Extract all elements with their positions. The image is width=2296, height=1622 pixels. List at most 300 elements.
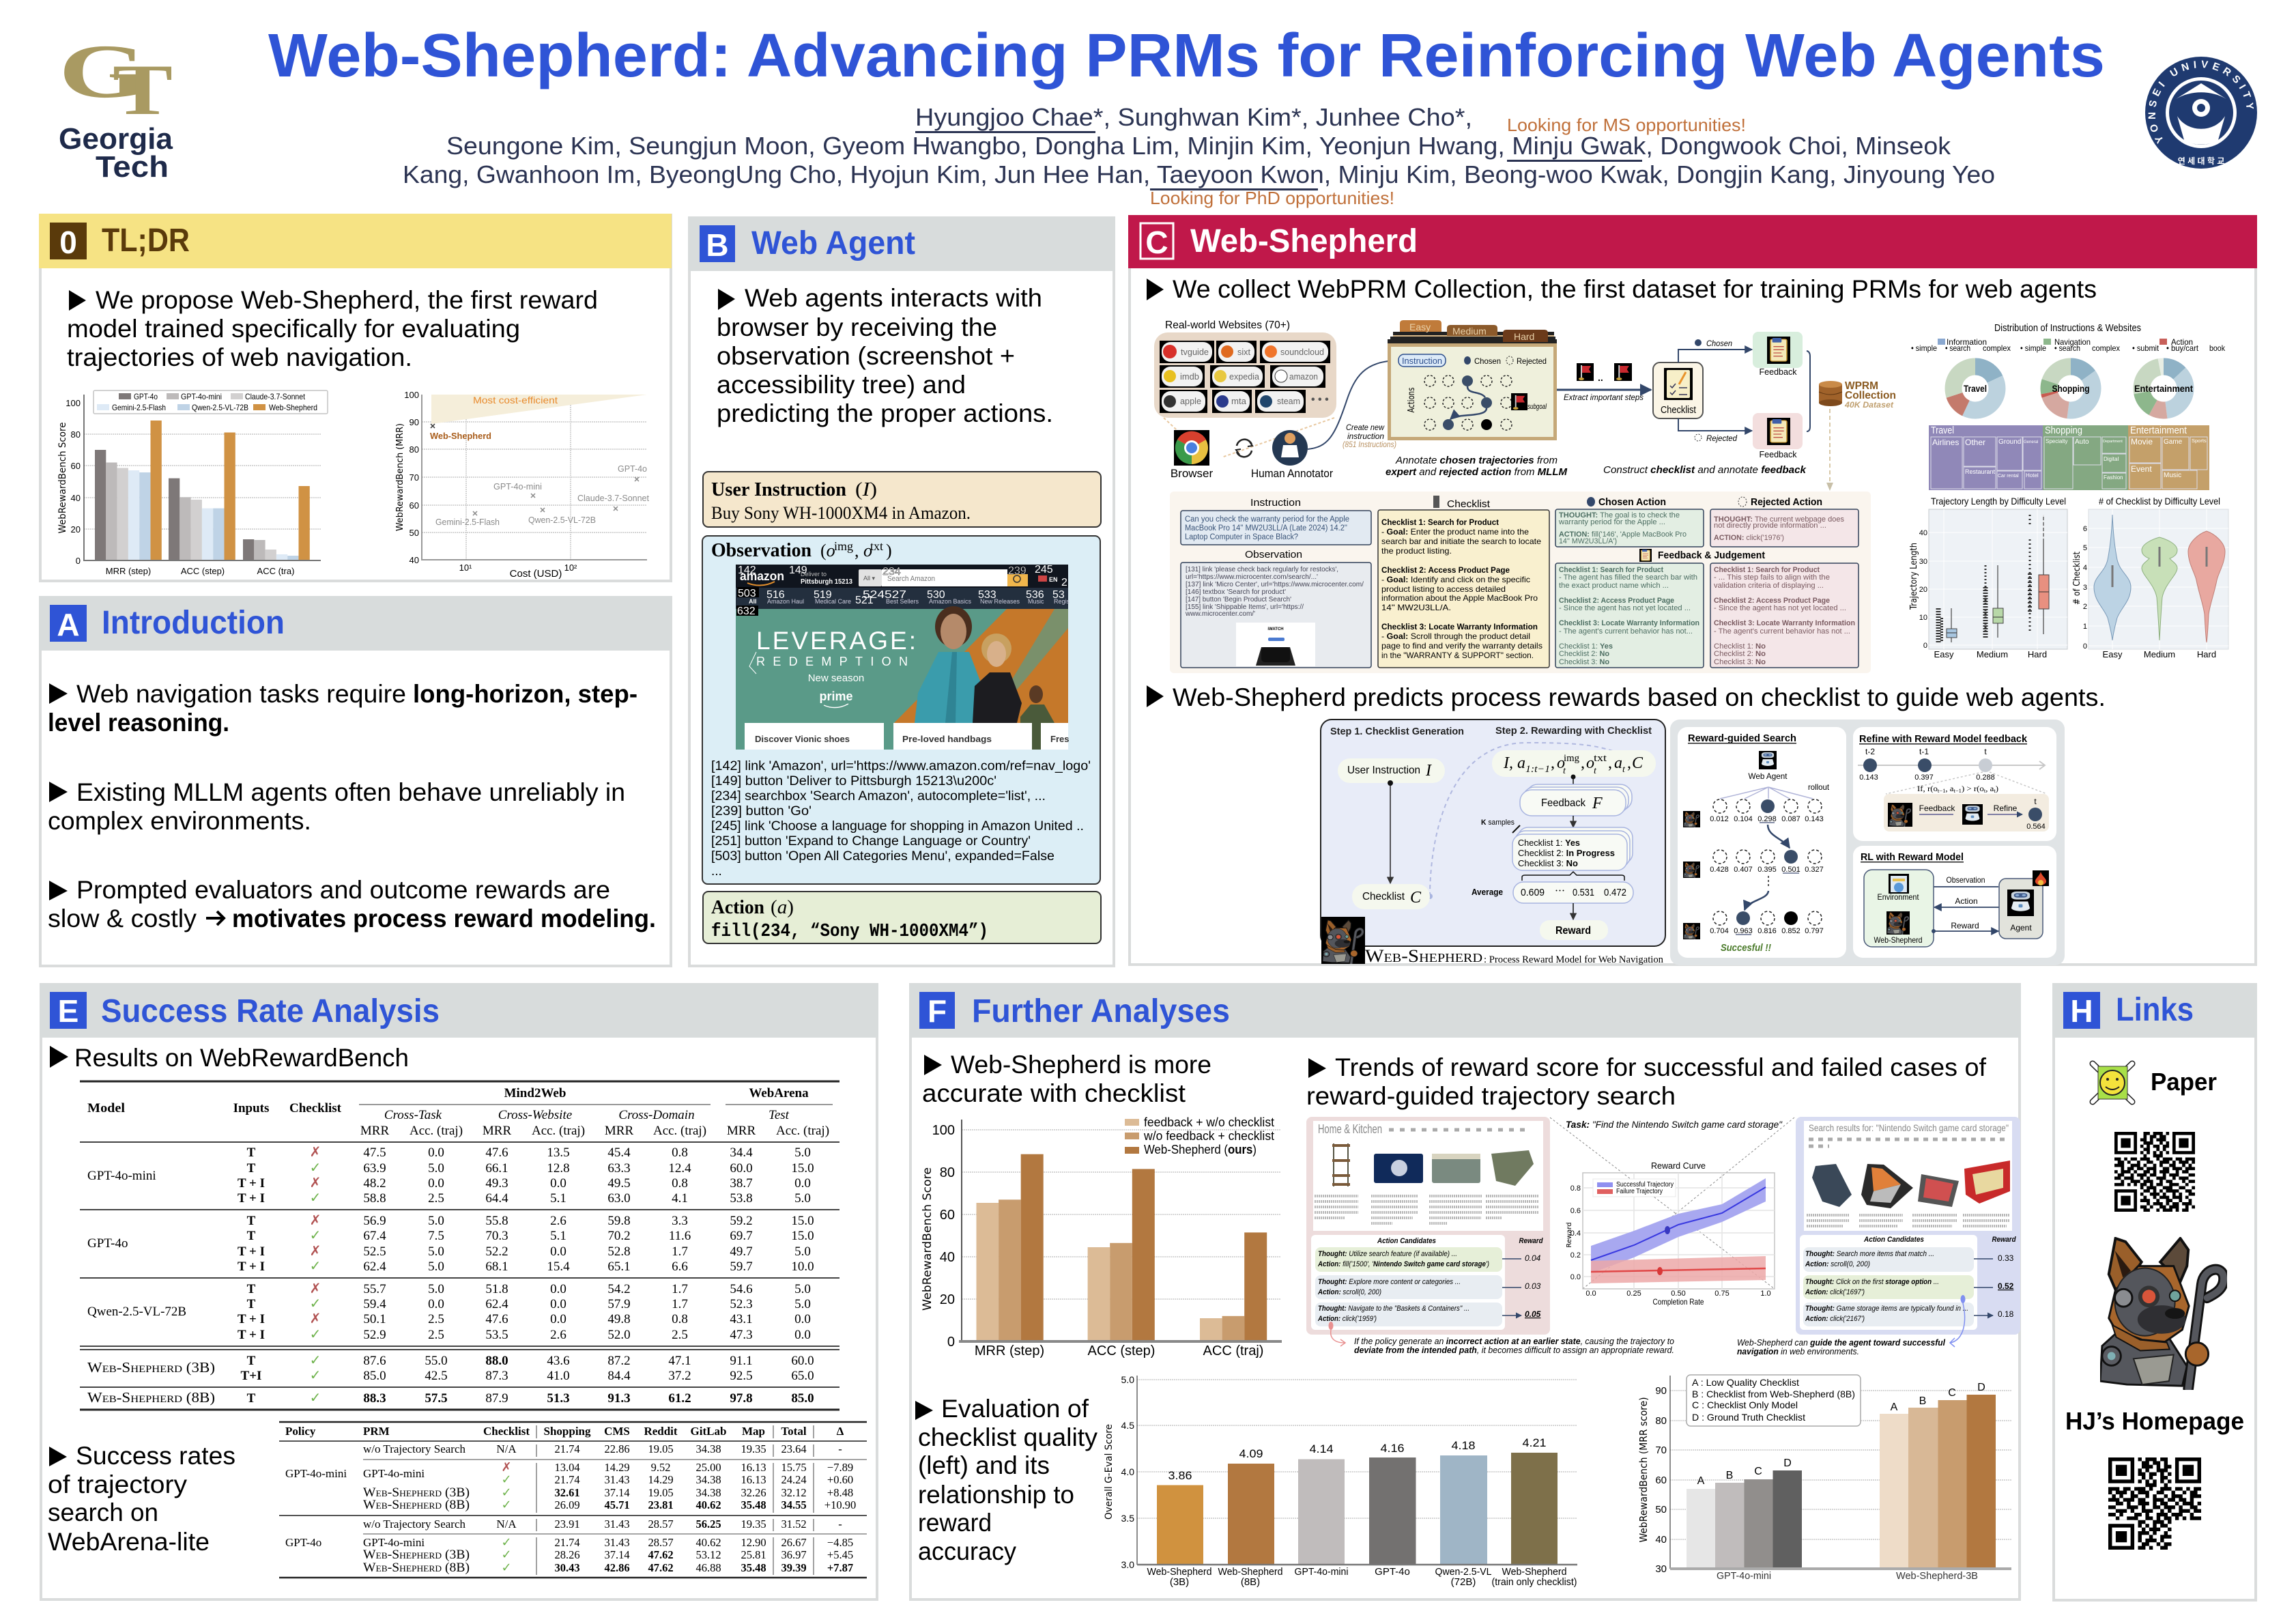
- card: refine with reward model feedback: t: [1994, 788, 1996, 794]
- table: WebRewardBench results: 50.1: [363, 1312, 386, 1326]
- table: trajectory search success rates: 22.86: [604, 1442, 630, 1455]
- card: reward-guided search: 0.395: [1757, 866, 1777, 874]
- table: WebRewardBench results: 0.8: [672, 1312, 688, 1326]
- reward curve chart: [1550, 1118, 1794, 1307]
- table: WebRewardBench results: 87.6: [363, 1354, 386, 1368]
- box: observation: ): [886, 541, 892, 560]
- feedback stack: Feedback: [1541, 797, 1586, 809]
- table: trajectory search success rates: 31.52: [781, 1518, 807, 1531]
- card: refine with reward model feedback: If, r(o: [1917, 784, 1936, 793]
- text: unreliable agents: complex environments.: [48, 807, 311, 835]
- text: slow and costly evaluators: slow & costly: [48, 905, 197, 933]
- note: successful case: [1737, 1337, 1945, 1356]
- checklist evaluation stack: Checklist 2: In Progress: [1518, 848, 1615, 858]
- authors: Kang, Gwanhoon Im, ByeongUng Cho, Hyojun Kim, Jun Hee Han, Taeyoon Kwon, Minju Kim, Beong-woo Kwak, Dongjin Kang, Jinyoung Yeo: [403, 160, 1995, 188]
- card: refine with reward model feedback: Refine with Reward Model feedback: [1859, 733, 2028, 745]
- table: WebRewardBench results: 59.8: [607, 1214, 631, 1228]
- table: WebRewardBench results: 57.5: [425, 1391, 448, 1406]
- text: web agent description: [717, 284, 1053, 427]
- bar chart: G-Eval score: (3B): [1170, 1576, 1189, 1588]
- box: user instruction: (I): [855, 479, 877, 500]
- table: WebRewardBench results: 15.0: [791, 1161, 814, 1176]
- table: WebRewardBench results: ✗: [310, 1244, 321, 1259]
- feedback cards: Feedback: [1760, 367, 1797, 377]
- card: refine with reward model feedback: t: [1984, 788, 1986, 794]
- box plot: trajectory length by difficulty: 10: [1919, 614, 1927, 622]
- text: checklist quality evaluation: checklist quality: [918, 1423, 1098, 1451]
- card: RL with reward model: Web-Shepherd: [1874, 935, 1922, 945]
- feedback and judgement boxes: Checklist 3: No: [1559, 658, 1609, 666]
- table: trajectory search success rates: 15.75: [781, 1461, 807, 1474]
- table: WebRewardBench results: Acc. (traj): [410, 1124, 463, 1138]
- donut: Entertainment: Entertainment: [2134, 383, 2193, 394]
- text: success rates: of trajectory: [48, 1470, 188, 1498]
- text: more accurate with checklist: accurate with checklist: [922, 1079, 1186, 1107]
- table: WebRewardBench results: ✗: [310, 1145, 321, 1160]
- reward curve chart: 0.0: [1585, 1290, 1596, 1298]
- authors: Seungone Kim, Seungjun Moon, Gyeom Hwangbo, Dongha Lim, Minjin Kim, Yeonjun Hwang, Minju Gwak, Dongwook Choi, Minseok: [446, 132, 1951, 160]
- screenshot: Amazon homepage: Amazon Basics: [929, 598, 972, 605]
- screenshot: Amazon homepage: 632: [737, 606, 756, 617]
- formula input node: t: [1563, 766, 1566, 776]
- table: trajectory search success rates: 23.81: [648, 1498, 674, 1511]
- bar chart: checklist quality vs reward accuracy: 80: [1655, 1415, 1667, 1427]
- card: refine with reward model feedback: t−1: [1938, 788, 1945, 794]
- screenshot: Amazon homepage: 519: [814, 589, 832, 601]
- table: WebRewardBench results: 12.8: [547, 1161, 570, 1176]
- card: refine with reward model feedback: 0.288: [1976, 773, 1995, 782]
- card: reward-guided search: 0.816: [1757, 927, 1777, 935]
- feedback and judgement boxes: Checklist 1: Yes: [1559, 642, 1613, 651]
- table: WebRewardBench results: 55.8: [485, 1214, 508, 1228]
- table: WebRewardBench results: ✓: [310, 1327, 321, 1342]
- table: WebRewardBench results: ✗: [310, 1281, 321, 1296]
- table: trajectory search success rates: 32.61: [554, 1486, 580, 1499]
- table: trajectory search success rates: 28.26: [554, 1548, 580, 1561]
- table: WebRewardBench results: 5.0: [428, 1282, 444, 1296]
- note: failed case: deviate from the intended path, it becomes difficult to assign an appropriate reward.: [1354, 1345, 1674, 1355]
- table: WebRewardBench results: 49.8: [607, 1312, 631, 1326]
- chosen action box: 14'' MW2U3LL/A'): [1559, 537, 1617, 545]
- text: long-horizon reasoning: [48, 680, 637, 737]
- donut: Travel: Travel: [1964, 383, 1987, 394]
- card: reward-guided search: 0.797: [1805, 927, 1824, 935]
- bar chart: G-Eval score: Overall G-Eval Score: [1104, 1424, 1115, 1520]
- logo: Yonsei University seal: YONSEI UNIVERSITY: [2149, 60, 2254, 144]
- table: trajectory search success rates: 34.55: [781, 1498, 807, 1511]
- text: slow and costly evaluators: [48, 876, 656, 933]
- chart: distribution of instructions and websites: Distribution of Instructions & Websites: [1994, 322, 2141, 334]
- bar chart: checklist quality vs reward accuracy: B: [1919, 1395, 1926, 1407]
- screenshot: Amazon homepage: amazon: [740, 569, 784, 583]
- table: WebRewardBench results: Web-Shepherd (8B): [87, 1389, 215, 1406]
- violin plot: checklists by difficulty: Hard: [2197, 649, 2216, 659]
- failed case panel: [1306, 1117, 1550, 1346]
- card: refine with reward model feedback: t−1: [1953, 788, 1962, 794]
- card: refine with reward model feedback: ): [1996, 784, 1998, 793]
- averaged score: 0.472: [1604, 887, 1626, 898]
- table: WebRewardBench results: 85.0: [791, 1391, 814, 1406]
- heading: Web-Shepherd: Web-Shepherd: [1190, 223, 1418, 259]
- violin plot: checklists by difficulty: # of Checklist by Difficulty Level: [2099, 496, 2220, 507]
- violin plot: checklists by difficulty: 1: [2083, 623, 2087, 631]
- scatter chart: reward score vs cost: 80: [410, 444, 419, 455]
- table: trajectory search success rates: +8.48: [827, 1486, 853, 1499]
- chart: distribution of instructions and websites: • simple: [1911, 343, 1937, 353]
- instruction box: MacBook Pro 14'' MW2U3LL/A (Late 2024) 14.2'': [1185, 524, 1347, 532]
- failed case panel: 0.03: [1525, 1281, 1541, 1291]
- screenshot: Amazon homepage: 516: [766, 589, 785, 601]
- table: trajectory search success rates: 13.04: [554, 1461, 580, 1474]
- table: WebRewardBench results: 6.6: [672, 1260, 688, 1274]
- table: WebRewardBench results: 1.7: [672, 1297, 688, 1311]
- screenshot: Amazon homepage: Fres: [1050, 734, 1069, 744]
- checklist box: - Goal: Identify and click on the specific: [1381, 575, 1530, 584]
- treemap: websites by category: Travel: [1931, 425, 1954, 436]
- bar chart: checklist quality vs reward accuracy: C: [1754, 1466, 1762, 1477]
- screenshot: Amazon homepage: 521: [855, 595, 874, 606]
- screenshot: Amazon homepage: REDEMPTION: [756, 655, 908, 668]
- table: WebRewardBench results: 85.0: [363, 1369, 386, 1383]
- text: accessibility tree: [142] link 'Amazon', url='https://www.amazon.com/ref=nav_logo': [711, 759, 1091, 773]
- checklist box: the product listing.: [1381, 546, 1452, 556]
- donut: Travel: [1953, 367, 1997, 410]
- table: WebRewardBench results: Cross-Task: [384, 1108, 442, 1122]
- extraction arrow and checklist: [1557, 339, 1752, 443]
- table: trajectory search success rates: +0.60: [827, 1473, 853, 1486]
- failed case panel: Thought: Explore more content or categories ...: [1318, 1278, 1461, 1286]
- extraction arrow and checklist: Extract important steps: [1564, 393, 1644, 402]
- bar chart: WebRewardBench score by model: 40: [71, 493, 81, 503]
- table: trajectory search success rates: 47.62: [648, 1561, 674, 1574]
- card: reward-guided search: 0.428: [1710, 866, 1729, 874]
- failed case panel: Thought: Navigate to the "Baskets & Containers" ...: [1318, 1305, 1469, 1313]
- screenshot: Amazon homepage: 2: [1061, 577, 1067, 588]
- table: WebRewardBench results: ✗: [310, 1311, 321, 1326]
- feedback and judgement boxes: - The agent has filled the search bar with: [1559, 573, 1697, 582]
- table: WebRewardBench results: T: [247, 1229, 256, 1243]
- table: WebRewardBench results: 59.7: [730, 1260, 753, 1274]
- screenshot: Amazon homepage: prime: [819, 689, 853, 703]
- violin plot: checklists by difficulty: 2: [2083, 603, 2087, 611]
- bar chart: checklist quality vs reward accuracy: B : Checklist from Web-Shepherd (8B): [1692, 1389, 1855, 1399]
- table: WebRewardBench results: 0.0: [550, 1312, 566, 1326]
- scatter chart: reward score vs cost: Qwen-2.5-VL-72B: [528, 515, 596, 525]
- table: WebRewardBench results: 87.3: [485, 1369, 508, 1383]
- label: homepage: HJ’s Homepage: [2065, 1407, 2244, 1435]
- treemap: websites by category: Specialty: [2046, 438, 2067, 444]
- table: trajectory search success rates: N/A: [496, 1442, 517, 1455]
- screenshot: Amazon homepage: Search Amazon: [887, 575, 935, 583]
- treemap: websites by category: Ground: [1998, 438, 2021, 446]
- table: WebRewardBench results: 2.5: [428, 1191, 444, 1206]
- heading: Introduction: Introduction: [102, 605, 285, 641]
- checklist box: Checklist 2: Access Product Page: [1381, 565, 1510, 575]
- feedback and judgement boxes: Checklist 3: Locate Warranty Information: [1559, 619, 1699, 627]
- table: WebRewardBench results: Inputs: [233, 1101, 269, 1115]
- successful case panel: Action: click('1697'): [1805, 1288, 1865, 1296]
- card: reward-guided search: 0.087: [1781, 815, 1800, 823]
- card: RL with reward model: Action: [1955, 896, 1978, 906]
- caption: annotate trajectories: [1386, 455, 1567, 478]
- rejected action box: [1710, 496, 1859, 547]
- table: WebRewardBench results: 60.0: [791, 1354, 814, 1368]
- checklist box: information about the Apple MacBook Pro: [1381, 593, 1538, 603]
- table: WebRewardBench results: WebArena: [749, 1086, 809, 1100]
- card: RL with reward model: [1853, 846, 2056, 958]
- box: action: (a): [771, 897, 794, 918]
- table: WebRewardBench results: 56.9: [363, 1214, 386, 1228]
- text: process rewards: Web-Shepherd predicts process rewards based on checklist to guide web agents.: [1173, 683, 2106, 711]
- screenshot: Amazon homepage: New Releases: [980, 598, 1020, 605]
- table: WebRewardBench results: 67.4: [363, 1229, 386, 1243]
- table: WebRewardBench results: 64.4: [485, 1191, 508, 1206]
- text: accessibility tree: [503] button 'Open All Categories Menu', expanded=False: [711, 849, 1054, 864]
- table: WebRewardBench results: Checklist: [289, 1101, 342, 1115]
- card: reward-guided search: 0.327: [1805, 866, 1824, 874]
- table: trajectory search success rates: +5.45: [827, 1548, 853, 1561]
- chart: distribution of instructions and websites: Navigation: [2054, 337, 2091, 347]
- table: trajectory search success rates: 25.81: [741, 1548, 766, 1561]
- box: observation: (o: [820, 541, 835, 560]
- table: trajectory search success rates: Reddit: [644, 1425, 678, 1438]
- table: WebRewardBench results: 7.5: [428, 1229, 444, 1243]
- chart: distribution of instructions and websites: • search: [1945, 343, 1970, 353]
- scatter chart: reward score vs cost: Web-Shepherd: [430, 431, 491, 441]
- box plot: trajectory length by difficulty: [1909, 496, 2067, 659]
- bar chart: checklist quality vs reward accuracy: WebRewardBench (MRR score): [1637, 1397, 1650, 1543]
- text: slow and costly evaluators: motivates process reward modeling.: [232, 905, 656, 933]
- screenshot: Amazon homepage: All ▾: [863, 575, 876, 582]
- table: trajectory search success rates: w/o Trajectory Search: [363, 1442, 465, 1455]
- box plot: trajectory length by difficulty: 40: [1919, 529, 1927, 537]
- screenshot: Amazon homepage: 524527: [863, 589, 906, 601]
- table: trajectory search success rates: w/o Trajectory Search: [363, 1518, 465, 1531]
- reward curve chart: 0.4: [1570, 1229, 1581, 1238]
- websites group: steam: [1277, 396, 1300, 406]
- table: WebRewardBench results: 47.6: [485, 1146, 508, 1160]
- formula input node: 1:t−1: [1525, 764, 1550, 775]
- successful case panel: Thought: Search more items that match ...: [1805, 1250, 1934, 1258]
- table: WebRewardBench results: 2.5: [428, 1328, 444, 1342]
- treemap: websites by category: Digital: [2104, 456, 2119, 462]
- browser and annotator: instruction: [1347, 431, 1384, 441]
- table: WebRewardBench results: ✓: [310, 1368, 321, 1383]
- panel: Success Rate Analysis: [40, 983, 878, 1599]
- table: WebRewardBench results: 59.4: [363, 1297, 386, 1311]
- table: WebRewardBench results: 47.3: [730, 1328, 753, 1342]
- table: WebRewardBench results: T + I: [238, 1328, 265, 1342]
- user instruction node: [1338, 758, 1445, 783]
- screenshot: Amazon homepage: Music: [1028, 598, 1044, 605]
- treemap: websites by category: Game: [2164, 438, 2183, 446]
- bar chart: G-Eval score: Qwen-2.5-VL: [1435, 1566, 1492, 1578]
- screenshot: Amazon homepage: Medical Care: [815, 598, 851, 605]
- table: WebRewardBench results: Cross-Domain: [618, 1108, 695, 1122]
- observation box: url='https://www.microcenter.com/search/...': [1186, 573, 1318, 581]
- scatter chart: reward score vs cost: 50: [410, 528, 419, 538]
- table: WebRewardBench results: 0.0: [428, 1297, 444, 1311]
- table: WebRewardBench results: 52.3: [730, 1297, 753, 1311]
- averaged score: 0.531: [1573, 887, 1594, 898]
- bar chart: WebRewardBench score by model: 20: [71, 524, 81, 535]
- heading: Further Analyses: F: [928, 993, 947, 1029]
- reward curve chart: 0.0: [1570, 1273, 1581, 1281]
- bar chart: accuracy with checklist: 80: [940, 1165, 955, 1180]
- feedback and judgement boxes: Checklist 1: Search for Product: [1714, 566, 1820, 574]
- table: WebRewardBench results: 52.5: [363, 1244, 386, 1259]
- treemap: websites by category: Car rental: [1998, 474, 2019, 479]
- successful case panel: [1796, 1117, 2020, 1347]
- screenshot: Amazon homepage: Deliver to: [801, 571, 827, 578]
- failed case panel: Thought: Utilize search feature (if available) ...: [1318, 1250, 1457, 1258]
- text: more accurate with checklist: [922, 1051, 1211, 1107]
- table: WebRewardBench results: 57.9: [607, 1297, 631, 1311]
- text: WebPRM Collection: We collect WebPRM Collection, the first dataset for training PRMs for web agents: [1173, 275, 2097, 303]
- card: refine with reward model feedback: t: [2034, 797, 2037, 806]
- table: trajectory search success rates: Map: [742, 1425, 765, 1438]
- extraction arrow and checklist: Checklist: [1661, 404, 1697, 416]
- scatter chart: reward score vs cost: [395, 390, 649, 580]
- table: WebRewardBench results: 60.0: [730, 1161, 753, 1176]
- table: WebRewardBench results: 52.8: [607, 1244, 631, 1259]
- bar chart: accuracy with checklist: ACC (step): [1088, 1343, 1155, 1358]
- table: WebRewardBench results: 49.5: [607, 1176, 631, 1191]
- table: WebRewardBench results: GPT-4o-mini: [87, 1169, 156, 1183]
- table: WebRewardBench results: 84.4: [607, 1369, 631, 1383]
- panel: Links: [2052, 983, 2257, 1600]
- scatter chart: reward score vs cost: 90: [410, 417, 419, 427]
- failed case panel: 0.05: [1525, 1309, 1541, 1319]
- folder of trajectories: Easy: [1409, 322, 1431, 332]
- box: observation: txt: [870, 539, 883, 553]
- card: refine with reward model feedback: , a: [1945, 784, 1954, 793]
- bar chart: accuracy with checklist: [921, 1115, 1282, 1358]
- folder of trajectories: Medium: [1452, 326, 1487, 337]
- formula input node: C: [1632, 754, 1644, 772]
- successful case panel: Thought: Game storage items are typically found in ...: [1805, 1305, 1968, 1313]
- successful case panel: Thought: Click on the first storage option ...: [1805, 1278, 1939, 1286]
- bar chart: G-Eval score: 4.16: [1380, 1442, 1405, 1455]
- checklist box: 14'' MW2U3LL/A.: [1381, 603, 1451, 612]
- table: trajectory search success rates: ✓: [501, 1485, 512, 1500]
- table: WebRewardBench results: MRR: [483, 1124, 511, 1138]
- table: WebRewardBench results: 5.0: [794, 1297, 811, 1311]
- violin plot: checklists by difficulty: 6: [2083, 525, 2087, 533]
- card: refine with reward model feedback: t: [1984, 747, 1987, 756]
- card: reward-guided search: 0.501: [1781, 866, 1800, 874]
- WPRM Collection database: 40K Dataset: [1844, 400, 1894, 410]
- table: WebRewardBench results: 0.0: [794, 1312, 811, 1326]
- scatter chart: reward score vs cost: 100: [404, 390, 419, 400]
- note: PhD opportunities: Looking for PhD opportunities!: [1150, 188, 1394, 208]
- table: trajectory search success rates: CMS: [604, 1425, 630, 1438]
- websites group: [1154, 319, 1336, 457]
- box plot: trajectory length by difficulty: Trajectory Length: [1909, 543, 1919, 610]
- bar chart: checklist quality vs reward accuracy: 30: [1655, 1563, 1667, 1575]
- folder of trajectories: [1388, 320, 1557, 440]
- feedback and judgement boxes: Checklist 3: Locate Warranty Information: [1714, 619, 1855, 627]
- treemap: websites by category: Music: [2164, 472, 2181, 479]
- table: trajectory search success rates: 35.48: [741, 1498, 766, 1511]
- table: WebRewardBench results: T + I: [238, 1176, 265, 1191]
- feedback and judgement boxes: Checklist 2: Access Product Page: [1559, 597, 1674, 605]
- table: trajectory search success rates: 14.29: [648, 1473, 674, 1486]
- observation box: iWATCH: [1267, 627, 1284, 631]
- panel: Web Agent: [688, 216, 1115, 966]
- table: WebRewardBench results: 88.0: [485, 1354, 508, 1368]
- checklist node: C: [1410, 889, 1422, 907]
- table: WebRewardBench results: 54.6: [730, 1282, 753, 1296]
- table: WebRewardBench results: 48.2: [363, 1176, 386, 1191]
- formula input node: a: [1517, 754, 1525, 772]
- table: WebRewardBench results: 5.0: [428, 1161, 444, 1176]
- bar chart: checklist quality vs reward accuracy: C: [1948, 1387, 1956, 1399]
- chart: distribution of instructions and websites: Information: [1947, 337, 1987, 347]
- table: trajectory search success rates: +10.90: [824, 1498, 856, 1511]
- text: slow and costly evaluators: Prompted evaluators and outcome rewards are: [76, 876, 610, 904]
- treemap: websites by category: Airlines: [1932, 438, 1959, 447]
- extraction arrow and checklist: ..: [1598, 372, 1603, 383]
- text: reward score trends: [1306, 1053, 1987, 1110]
- card: reward-guided search: 0.852: [1781, 927, 1800, 935]
- table: trajectory search success rates: 26.09: [554, 1498, 580, 1511]
- card: refine with reward model feedback: Refine: [1994, 803, 2018, 813]
- diagram: applications of reward model: [1670, 720, 2065, 965]
- treemap: websites by category: General: [2024, 440, 2038, 444]
- table: WebRewardBench results: ✓: [310, 1296, 321, 1311]
- table: WebRewardBench results: 65.0: [791, 1369, 814, 1383]
- table: WebRewardBench results: 43.6: [547, 1354, 570, 1368]
- bar chart: G-Eval score: (train only checklist): [1492, 1576, 1577, 1588]
- table: WebRewardBench results: 58.8: [363, 1191, 386, 1206]
- bar chart: checklist quality vs reward accuracy: A: [1891, 1402, 1898, 1413]
- table: WebRewardBench results: 66.1: [485, 1161, 508, 1176]
- checklist box: Checklist 3: Locate Warranty Information: [1381, 622, 1538, 631]
- table: WebRewardBench results: T + I: [238, 1191, 265, 1206]
- reward curve chart: Successful Trajectory: [1616, 1181, 1674, 1189]
- bar chart: G-Eval score: Web-Shepherd: [1502, 1566, 1567, 1578]
- card: refine with reward model feedback: t-2: [1865, 747, 1875, 756]
- table: WebRewardBench results: ✓: [310, 1191, 321, 1206]
- table: WebRewardBench results: 63.9: [363, 1161, 386, 1176]
- table: WebRewardBench results: T + I: [238, 1244, 265, 1259]
- box plot: trajectory length by difficulty: Trajectory Length by Difficulty Level: [1931, 496, 2066, 507]
- donut: Shopping: [2049, 367, 2093, 410]
- bar chart: WebRewardBench score by model: ACC (tra): [257, 566, 294, 576]
- checklist box: product listing to access detailed: [1381, 584, 1506, 594]
- formula input node: o: [1557, 754, 1565, 772]
- formula input node: t: [1622, 765, 1626, 775]
- logo: Georgia Tech: Georgia: [59, 122, 173, 156]
- table: WebRewardBench results: 2.5: [672, 1328, 688, 1342]
- card: RL with reward model: Reward: [1951, 921, 1979, 930]
- table: WebRewardBench results: T: [247, 1214, 256, 1228]
- diagram: process reward model: Step 2. Rewarding with Checklist: [1495, 725, 1652, 737]
- feedback and judgement boxes: - The agent's current behavior has not ...: [1714, 627, 1850, 636]
- treemap: websites by category: Shopping: [2045, 425, 2082, 436]
- browser and annotator: Create new: [1346, 423, 1385, 432]
- bar chart: G-Eval score: 4.14: [1309, 1442, 1334, 1455]
- bar chart: G-Eval score: 5.0: [1121, 1374, 1134, 1385]
- failed case panel: 0.04: [1525, 1253, 1541, 1263]
- table: trajectory search success rates: 24.24: [781, 1473, 807, 1486]
- reward curve chart: 0.75: [1714, 1290, 1730, 1298]
- table: WebRewardBench results: Mind2Web: [504, 1086, 566, 1100]
- failed case panel: Action: click('1959'): [1317, 1315, 1377, 1323]
- table: trajectory search success rates: N/A: [496, 1518, 517, 1531]
- instruction box: [1181, 497, 1371, 545]
